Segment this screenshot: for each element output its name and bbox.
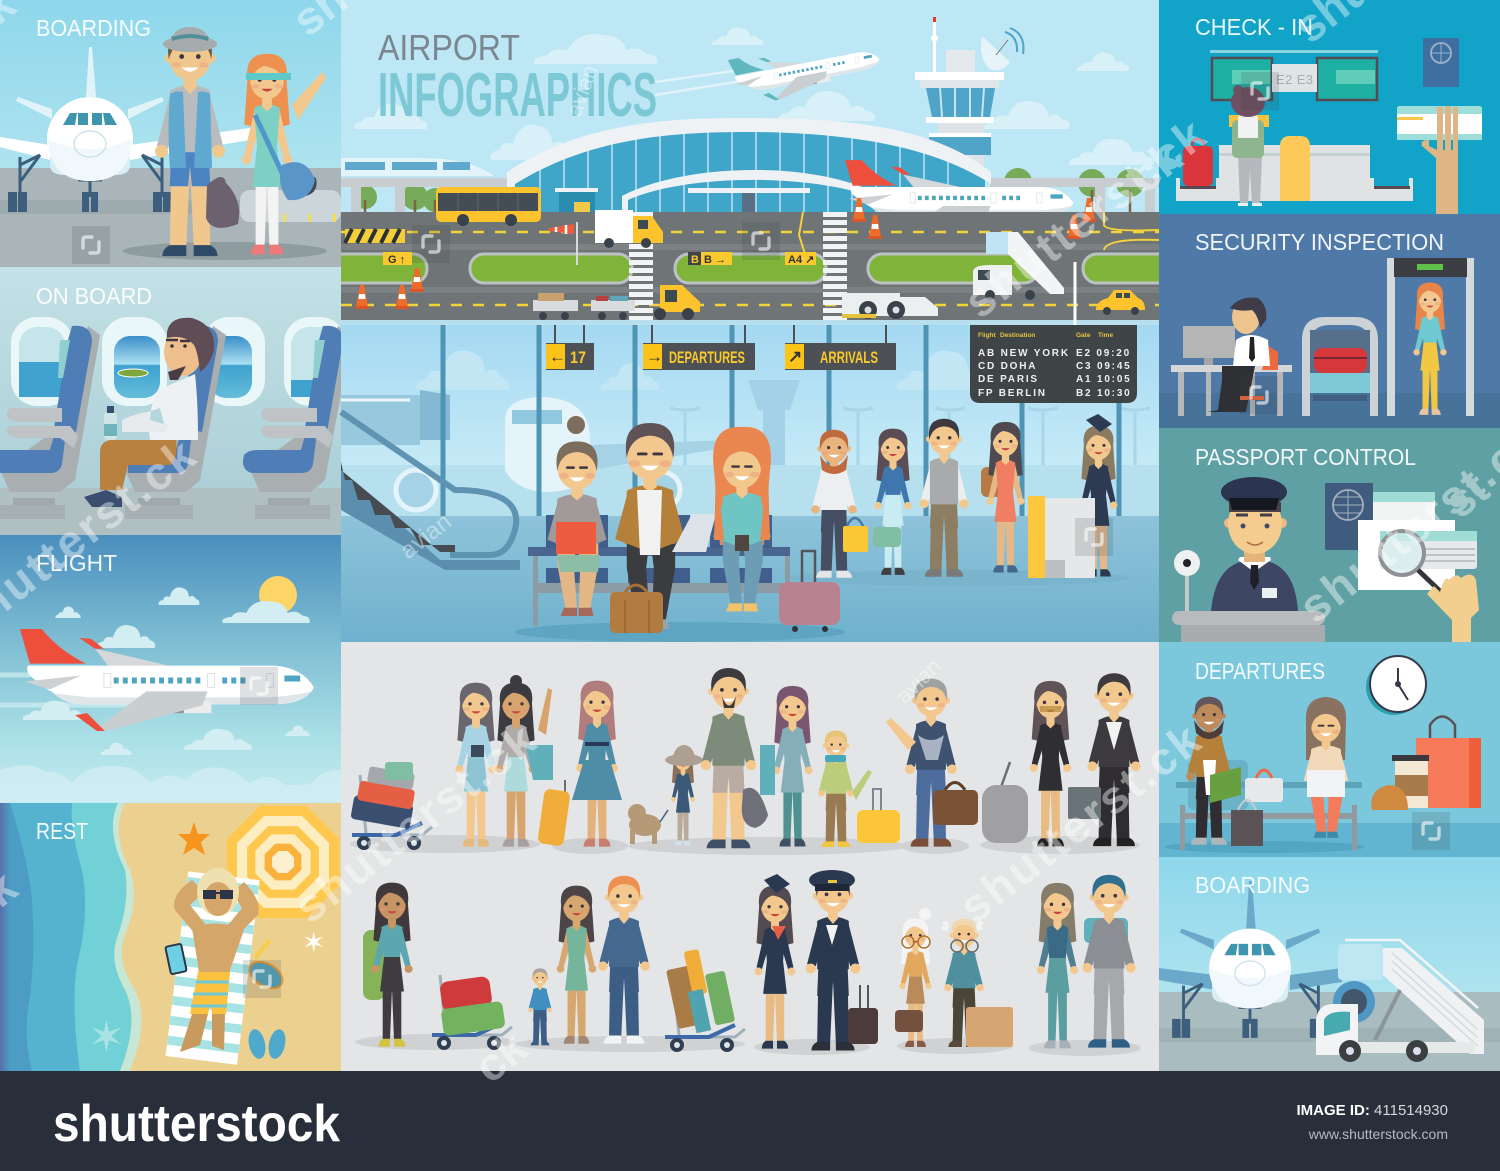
person: passport officer	[1211, 477, 1298, 611]
luggage cart	[350, 762, 432, 850]
icon: yellow bag	[843, 518, 868, 552]
icon: pink suitcase	[779, 550, 840, 632]
icon: orange suitcase	[537, 780, 571, 847]
icon: taxi	[1096, 290, 1145, 315]
person: seated woman with long orange hair	[713, 427, 771, 611]
icon: white starfish: ✶	[302, 927, 325, 958]
url: www.shutterstock.com	[1308, 1126, 1448, 1142]
person: backpacker woman	[363, 883, 413, 1047]
heading: CHECK - IN	[1195, 14, 1313, 40]
title	[378, 27, 657, 130]
screens	[1212, 58, 1377, 100]
bench	[528, 515, 790, 626]
watermarks: avian	[395, 508, 457, 565]
icon: beach umbrella	[227, 806, 339, 918]
icon: airplane side view	[20, 629, 314, 731]
icon: shopping bag red	[1416, 716, 1481, 808]
person: stewardess	[755, 874, 795, 1049]
icon: webcam	[1174, 550, 1200, 612]
watermarks: ck	[464, 1020, 537, 1093]
person: sunbathing man	[174, 868, 259, 1052]
icon: gray briefcase	[1068, 787, 1101, 819]
seats	[0, 326, 352, 519]
flight board: FP BERLIN	[978, 388, 1047, 399]
panel: rest	[0, 803, 341, 1071]
icon: handbag on bench	[1245, 770, 1283, 802]
person: traveler from behind	[1229, 85, 1269, 206]
gate sign	[1272, 64, 1317, 92]
airplane windows	[11, 317, 346, 406]
sign: gate 17: ←	[549, 347, 566, 366]
person: seated woman reading	[547, 416, 607, 616]
panel: check-in	[1159, 0, 1500, 214]
panel: passport control	[1159, 428, 1500, 642]
trees	[353, 168, 1144, 213]
flight board: Gate	[1076, 332, 1091, 339]
flight board: CD DOHA	[978, 361, 1037, 372]
clouds	[0, 587, 341, 802]
person: young man in hoodie	[1082, 875, 1136, 1048]
escalator	[341, 412, 520, 570]
person: businesswoman	[1030, 681, 1071, 846]
icon: jet engine	[1333, 981, 1375, 1023]
icon: passport	[1423, 38, 1459, 87]
sign: arrivals: ↗	[788, 347, 802, 366]
person: woman with backpack	[981, 422, 1024, 573]
flight board	[970, 325, 1137, 403]
background tower	[748, 380, 800, 480]
sun	[259, 576, 297, 614]
sign: A4: A4 ↗	[788, 254, 814, 266]
icon: flip flops	[246, 1028, 288, 1060]
metal detector arch	[1387, 258, 1474, 416]
striped pole	[1074, 262, 1076, 325]
panel: terminal interior	[341, 325, 1159, 642]
person: businessman	[1087, 673, 1141, 846]
icon: yellow suitcase	[857, 788, 900, 843]
image id: IMAGE ID: 411514930	[1297, 1102, 1448, 1119]
panel: security inspection	[1159, 214, 1500, 428]
icon: yellow bus	[436, 187, 541, 226]
watermarks: ck	[1119, 130, 1192, 203]
person: woman waving	[242, 54, 326, 254]
icon: parked airplane	[845, 160, 1073, 235]
heading: SECURITY INSPECTION	[1195, 229, 1444, 255]
heading: REST	[36, 818, 88, 844]
baggage scanner	[1302, 317, 1378, 416]
icon: shopping bag dark	[1231, 800, 1263, 846]
watermarks: st	[1434, 462, 1498, 528]
wings	[1159, 968, 1342, 990]
watermarks: shutterst.ck	[949, 713, 1210, 933]
terminal building	[507, 118, 991, 213]
runway	[320, 187, 1183, 326]
background plane	[341, 390, 730, 510]
desk with computer	[1171, 326, 1292, 416]
cones	[355, 198, 1096, 309]
person: woman in detector	[1413, 283, 1447, 415]
person: woman with camera	[455, 683, 497, 847]
window columns	[443, 325, 1119, 517]
panel: travelers collection	[341, 642, 1159, 1071]
person: man with hat and vest	[123, 27, 327, 260]
icon: orange starfish	[178, 822, 210, 855]
person: older man waving	[886, 679, 957, 847]
person: woman waving with bun	[495, 675, 553, 847]
person: man with beard in queue	[811, 430, 857, 578]
footer	[0, 1071, 1500, 1171]
heading: DEPARTURES	[1195, 658, 1325, 684]
luggage cart with red and green cases	[432, 975, 512, 1050]
watermarks: shutterst.ck	[954, 108, 1215, 328]
sign: departures: →	[646, 347, 663, 366]
heading: PASSPORT CONTROL	[1195, 444, 1416, 470]
person: blond boy with sunglasses	[818, 730, 872, 847]
icon: brown handbag	[610, 585, 663, 633]
windsock	[549, 222, 578, 265]
person: bearded man	[701, 668, 756, 848]
sign: G	[383, 252, 412, 266]
flight board: Destination	[1000, 332, 1035, 339]
sign: departures: DEPARTURES	[669, 348, 745, 367]
luggage cart with suitcases	[665, 949, 745, 1052]
person: woman in queue	[875, 429, 911, 575]
sign: arrivals: ARRIVALS	[820, 348, 878, 367]
ticket	[1397, 106, 1482, 140]
flight board: Flight	[978, 332, 997, 339]
mobile stairs truck	[1316, 940, 1484, 1062]
heading: BOARDING	[1195, 872, 1310, 898]
person: bearded man reading	[1186, 697, 1241, 845]
icon: plane front view	[8, 47, 172, 212]
check-in counter	[1176, 136, 1413, 201]
panel: on board	[0, 267, 352, 535]
person: pilot	[806, 870, 860, 1051]
bench	[1176, 760, 1362, 850]
person: old woman	[899, 908, 932, 1047]
icon: brown duffel	[933, 782, 978, 825]
icon: airplane taking off	[728, 32, 883, 108]
watermarks: avian	[891, 654, 946, 709]
panel: flight	[0, 535, 341, 803]
icon: green bag	[873, 527, 901, 547]
contrail	[655, 70, 760, 95]
sign: G: G ↑	[388, 254, 405, 266]
panel: boarding	[0, 0, 341, 267]
icon: handbag	[895, 1010, 923, 1032]
heading: BOARDING	[36, 15, 151, 41]
person: woman in hijab	[572, 681, 622, 847]
person: woman with purple hair	[760, 686, 813, 846]
pushback tug	[842, 293, 938, 319]
gate sign: E2 E3	[1276, 72, 1313, 87]
person: seated man with laptop	[615, 423, 716, 629]
watermark squares	[72, 72, 1450, 998]
icon: gray suitcase	[982, 762, 1028, 843]
flight board: A1 10:05	[1076, 374, 1132, 385]
panel: airport exterior	[341, 0, 1159, 235]
sign: B: B	[691, 254, 699, 266]
flight board: B2 10:30	[1076, 388, 1132, 399]
heading: FLIGHT	[36, 550, 117, 576]
icon: magnifying glass	[1380, 531, 1441, 592]
flight board: DE PARIS	[978, 374, 1039, 385]
flight board: E2 09:20	[1076, 348, 1131, 359]
person: security officer	[1208, 297, 1278, 412]
icon: snorkel mask	[245, 940, 287, 994]
mobile stairs	[973, 232, 1064, 300]
flight board: AB NEW YORK	[978, 348, 1070, 359]
icon: control tower	[915, 17, 1023, 165]
person: man in vest	[920, 419, 968, 577]
panel: boarding gate	[1159, 857, 1500, 1071]
icon: black suitcase	[848, 985, 878, 1044]
green islands	[341, 252, 1159, 284]
icon: phone	[165, 944, 187, 974]
desk	[1172, 611, 1325, 642]
person: woman in green dress	[557, 886, 596, 1044]
icon: plane front view	[1172, 881, 1328, 1038]
crossings	[641, 212, 835, 320]
icon: tan suitcase	[966, 1007, 1013, 1047]
documents	[1358, 492, 1477, 590]
icon: hand	[1427, 574, 1479, 642]
person: woman with laptop	[1304, 697, 1348, 838]
title: INFOGRAPHICS	[378, 61, 657, 130]
icon: starfish water: ✶	[88, 1013, 125, 1062]
icon: coffee cup	[1392, 755, 1429, 808]
watermarks: avian	[561, 62, 603, 120]
icon: hand	[1422, 106, 1458, 214]
sign: gate 17: 17	[570, 348, 586, 367]
person: girl with hat	[665, 745, 703, 845]
person: young woman	[1037, 883, 1078, 1048]
elevated rail	[341, 158, 1159, 213]
icon: delivery truck	[595, 210, 663, 248]
baggage carts and tug	[533, 285, 700, 320]
heading: ON BOARD	[36, 283, 152, 309]
icon: dog	[628, 804, 668, 844]
icon: red suitcase	[1183, 139, 1213, 186]
title: AIRPORT	[378, 27, 520, 68]
background clouds	[416, 350, 994, 390]
towel	[166, 871, 260, 1065]
person: old man	[944, 919, 984, 1047]
flight board: Time	[1098, 332, 1113, 339]
icon: wall clock	[1366, 656, 1426, 715]
sign: gate 17	[546, 325, 594, 370]
sign: arrivals	[785, 325, 896, 370]
person: stewardess	[1080, 414, 1117, 577]
sign: departures	[643, 325, 755, 370]
barrier	[345, 229, 405, 243]
person: man with orange hair	[598, 876, 650, 1044]
icon: passport	[1325, 483, 1373, 550]
watermarks: shutterst.ck	[284, 713, 545, 933]
check-in desk	[1028, 496, 1095, 578]
sign: B: B →	[704, 254, 726, 266]
icon: gray bag	[742, 788, 768, 828]
logo: shutterstock	[53, 1095, 340, 1153]
lamps	[670, 408, 1150, 470]
panel: departures	[1159, 642, 1500, 857]
person: toddler	[528, 968, 552, 1045]
icon: bread roll	[1371, 785, 1408, 810]
clouds	[354, 27, 1154, 165]
flight board: C3 09:45	[1076, 361, 1132, 372]
person: seated man with water bottle	[84, 318, 214, 507]
sign: B	[688, 252, 732, 266]
floor shadows	[350, 835, 1141, 1056]
